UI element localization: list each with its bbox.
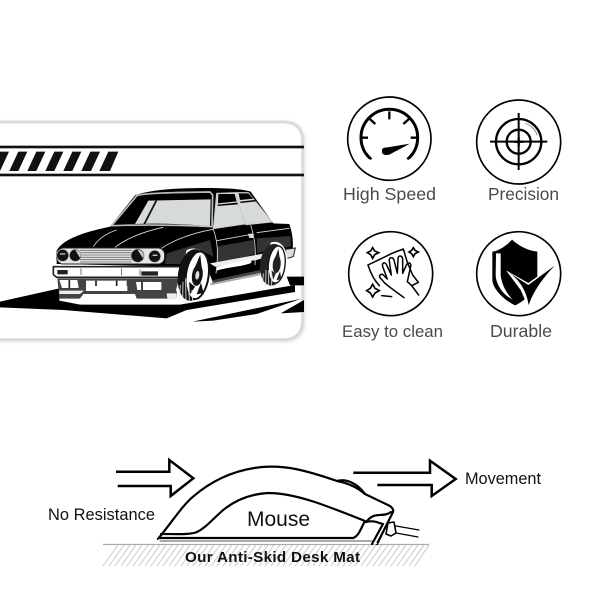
- label: Durable: Durable: [490, 321, 552, 341]
- racing lines and stripes: [0, 146, 304, 176]
- label: Easy to clean: Easy to clean: [342, 322, 443, 341]
- mat surface hatch: [103, 544, 429, 566]
- front wheel: [174, 247, 212, 303]
- label: High Speed: High Speed: [343, 184, 436, 204]
- sill stripes: [210, 253, 269, 267]
- icon: Easy to clean: [349, 232, 433, 316]
- windshield: [112, 192, 213, 227]
- icon: High Speed gauge: [348, 97, 431, 180]
- icon: Precision target: [477, 100, 561, 184]
- mouse outline: [158, 467, 419, 544]
- rear bumper: [285, 248, 295, 259]
- label: No Resistance: No Resistance: [48, 506, 155, 524]
- label: Movement: Movement: [465, 470, 541, 488]
- ground shadow: [0, 277, 304, 322]
- arrow: resistance airflow: [116, 460, 193, 496]
- lower door panels: [217, 240, 255, 265]
- side windows: [213, 193, 245, 229]
- panel: desk mat with car artwork: [0, 122, 304, 340]
- headlights: [57, 249, 161, 262]
- body crease lines: [93, 225, 289, 273]
- rear wheel: [258, 242, 288, 287]
- mat base: [0, 122, 303, 340]
- car: [53, 188, 295, 303]
- panel: mouse glide diagram: [48, 460, 541, 566]
- label: Our Anti-Skid Desk Mat: Our Anti-Skid Desk Mat: [185, 549, 360, 566]
- lower air dam: [57, 278, 180, 299]
- front grille panel: [57, 248, 165, 264]
- icon: Durable shield: [477, 232, 561, 316]
- front bumper: [53, 266, 184, 280]
- arrow: movement: [353, 461, 456, 496]
- car body: [57, 188, 293, 283]
- label: Precision: Precision: [488, 184, 559, 204]
- label: Mouse: Mouse: [247, 508, 310, 531]
